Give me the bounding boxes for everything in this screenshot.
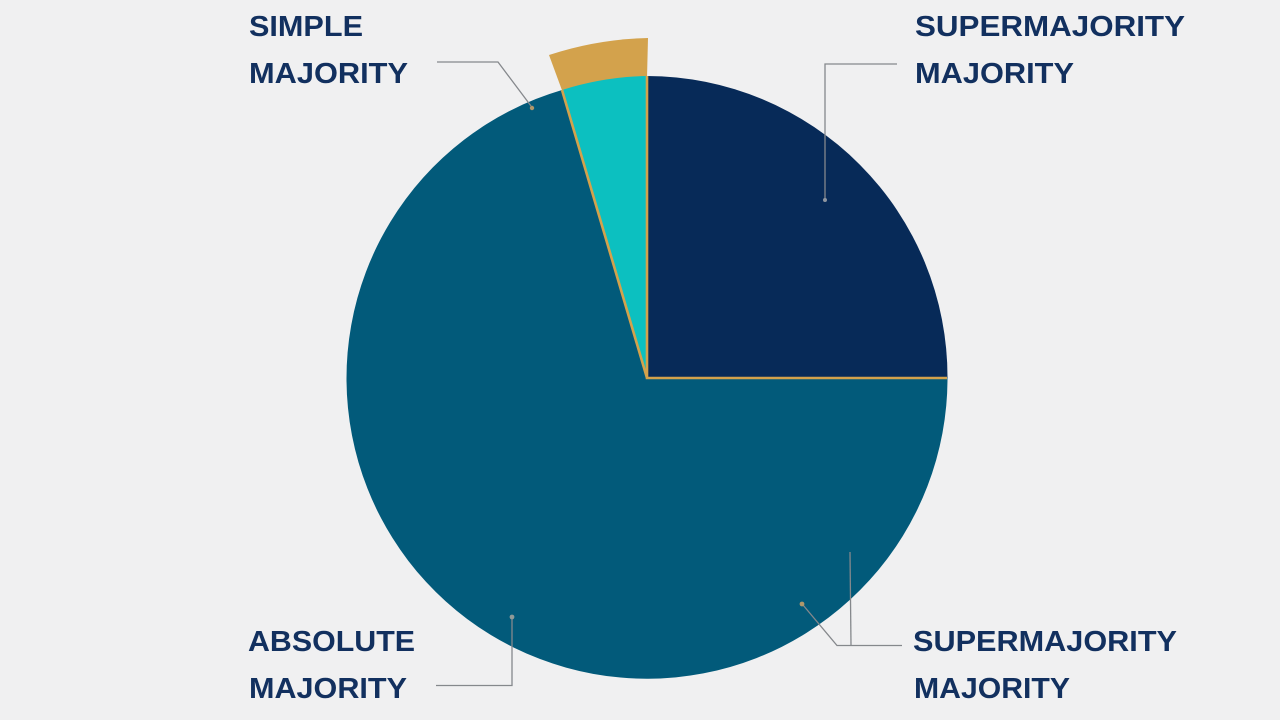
leader line: bottom-right supermajority: [800, 552, 902, 646]
leader line: absolute majority: [436, 615, 514, 686]
leader line: top-right supermajority: [823, 64, 897, 202]
slice: absolute majority (teal): [347, 90, 948, 679]
label: simple majority: SIMPLE: [249, 11, 363, 43]
label: absolute majority: ABSOLUTE: [248, 626, 415, 658]
label: simple majority: MAJORITY: [249, 58, 408, 90]
label: bottom-right supermajority: [913, 626, 1177, 705]
label: top-right supermajority: SUPERMAJORITY: [915, 11, 1185, 43]
label: absolute majority: [248, 626, 415, 705]
label: bottom-right supermajority: MAJORITY: [914, 673, 1070, 705]
label: bottom-right supermajority: SUPERMAJORITY: [913, 626, 1177, 658]
slice borders (gold): [562, 76, 947, 378]
label: top-right supermajority: MAJORITY: [915, 58, 1074, 90]
slice: simple majority outer wedge (gold): [549, 38, 648, 93]
slice: supermajority (navy): [647, 76, 948, 378]
slice: simple majority inner wedge (cyan): [562, 76, 647, 378]
label: absolute majority: MAJORITY: [249, 673, 407, 705]
label: simple majority: [249, 11, 408, 90]
pie chart: [347, 38, 948, 679]
label: top-right supermajority: [915, 11, 1185, 90]
leader line: simple majority: [437, 62, 534, 110]
